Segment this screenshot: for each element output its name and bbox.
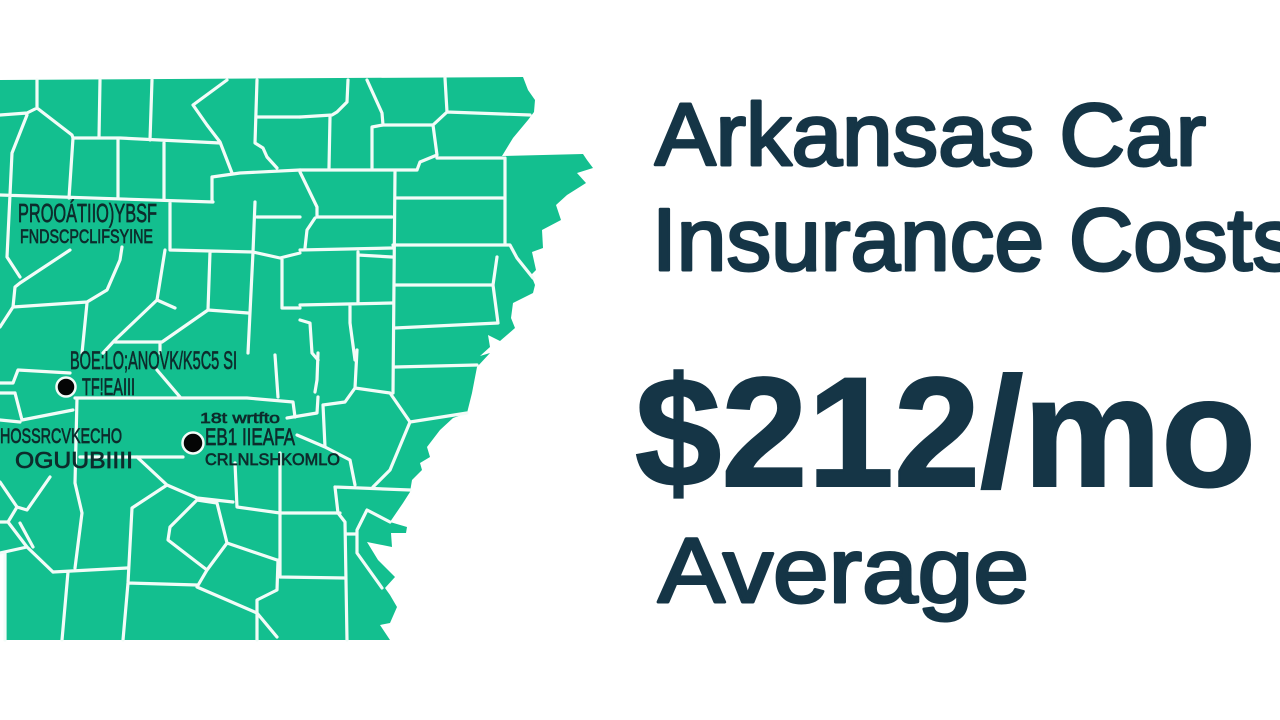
map label: region two: BOE:LO;ANOVK/K5C5 SI xyxy=(70,347,237,375)
map label: region two: TF!EAIII xyxy=(82,374,135,401)
city marker: west xyxy=(56,378,76,396)
map label: region one xyxy=(18,198,157,248)
map label: region four xyxy=(200,410,340,469)
panel: Arkansas county map xyxy=(0,77,593,640)
map: county boundaries xyxy=(0,78,533,640)
heading: title: Arkansas Car xyxy=(655,85,1206,184)
map label: region four: EB1 IIEAFA xyxy=(205,424,295,451)
big number: monthly cost: $212/mo xyxy=(635,346,1256,520)
map label: region four: CRLNLSHKOMLO xyxy=(205,450,340,469)
map label: region one: PROOÁTIIO)YBSF xyxy=(18,198,157,228)
map label: region one: FNDSCPCLIFSYINE xyxy=(20,227,153,248)
map label: region three xyxy=(0,425,133,473)
map label: region two xyxy=(70,347,237,401)
caption: average: Average xyxy=(658,520,1029,622)
city marker: central xyxy=(182,432,204,454)
map label: region three: OGUUBIIII xyxy=(15,447,133,473)
heading: title xyxy=(652,85,1280,289)
map: state silhouette xyxy=(0,77,593,640)
map label: region three: HOSSRCVKECHO xyxy=(0,425,122,448)
map label: region four: 18t wrtfto xyxy=(200,410,280,427)
heading: title: Insurance Costs xyxy=(652,190,1280,289)
